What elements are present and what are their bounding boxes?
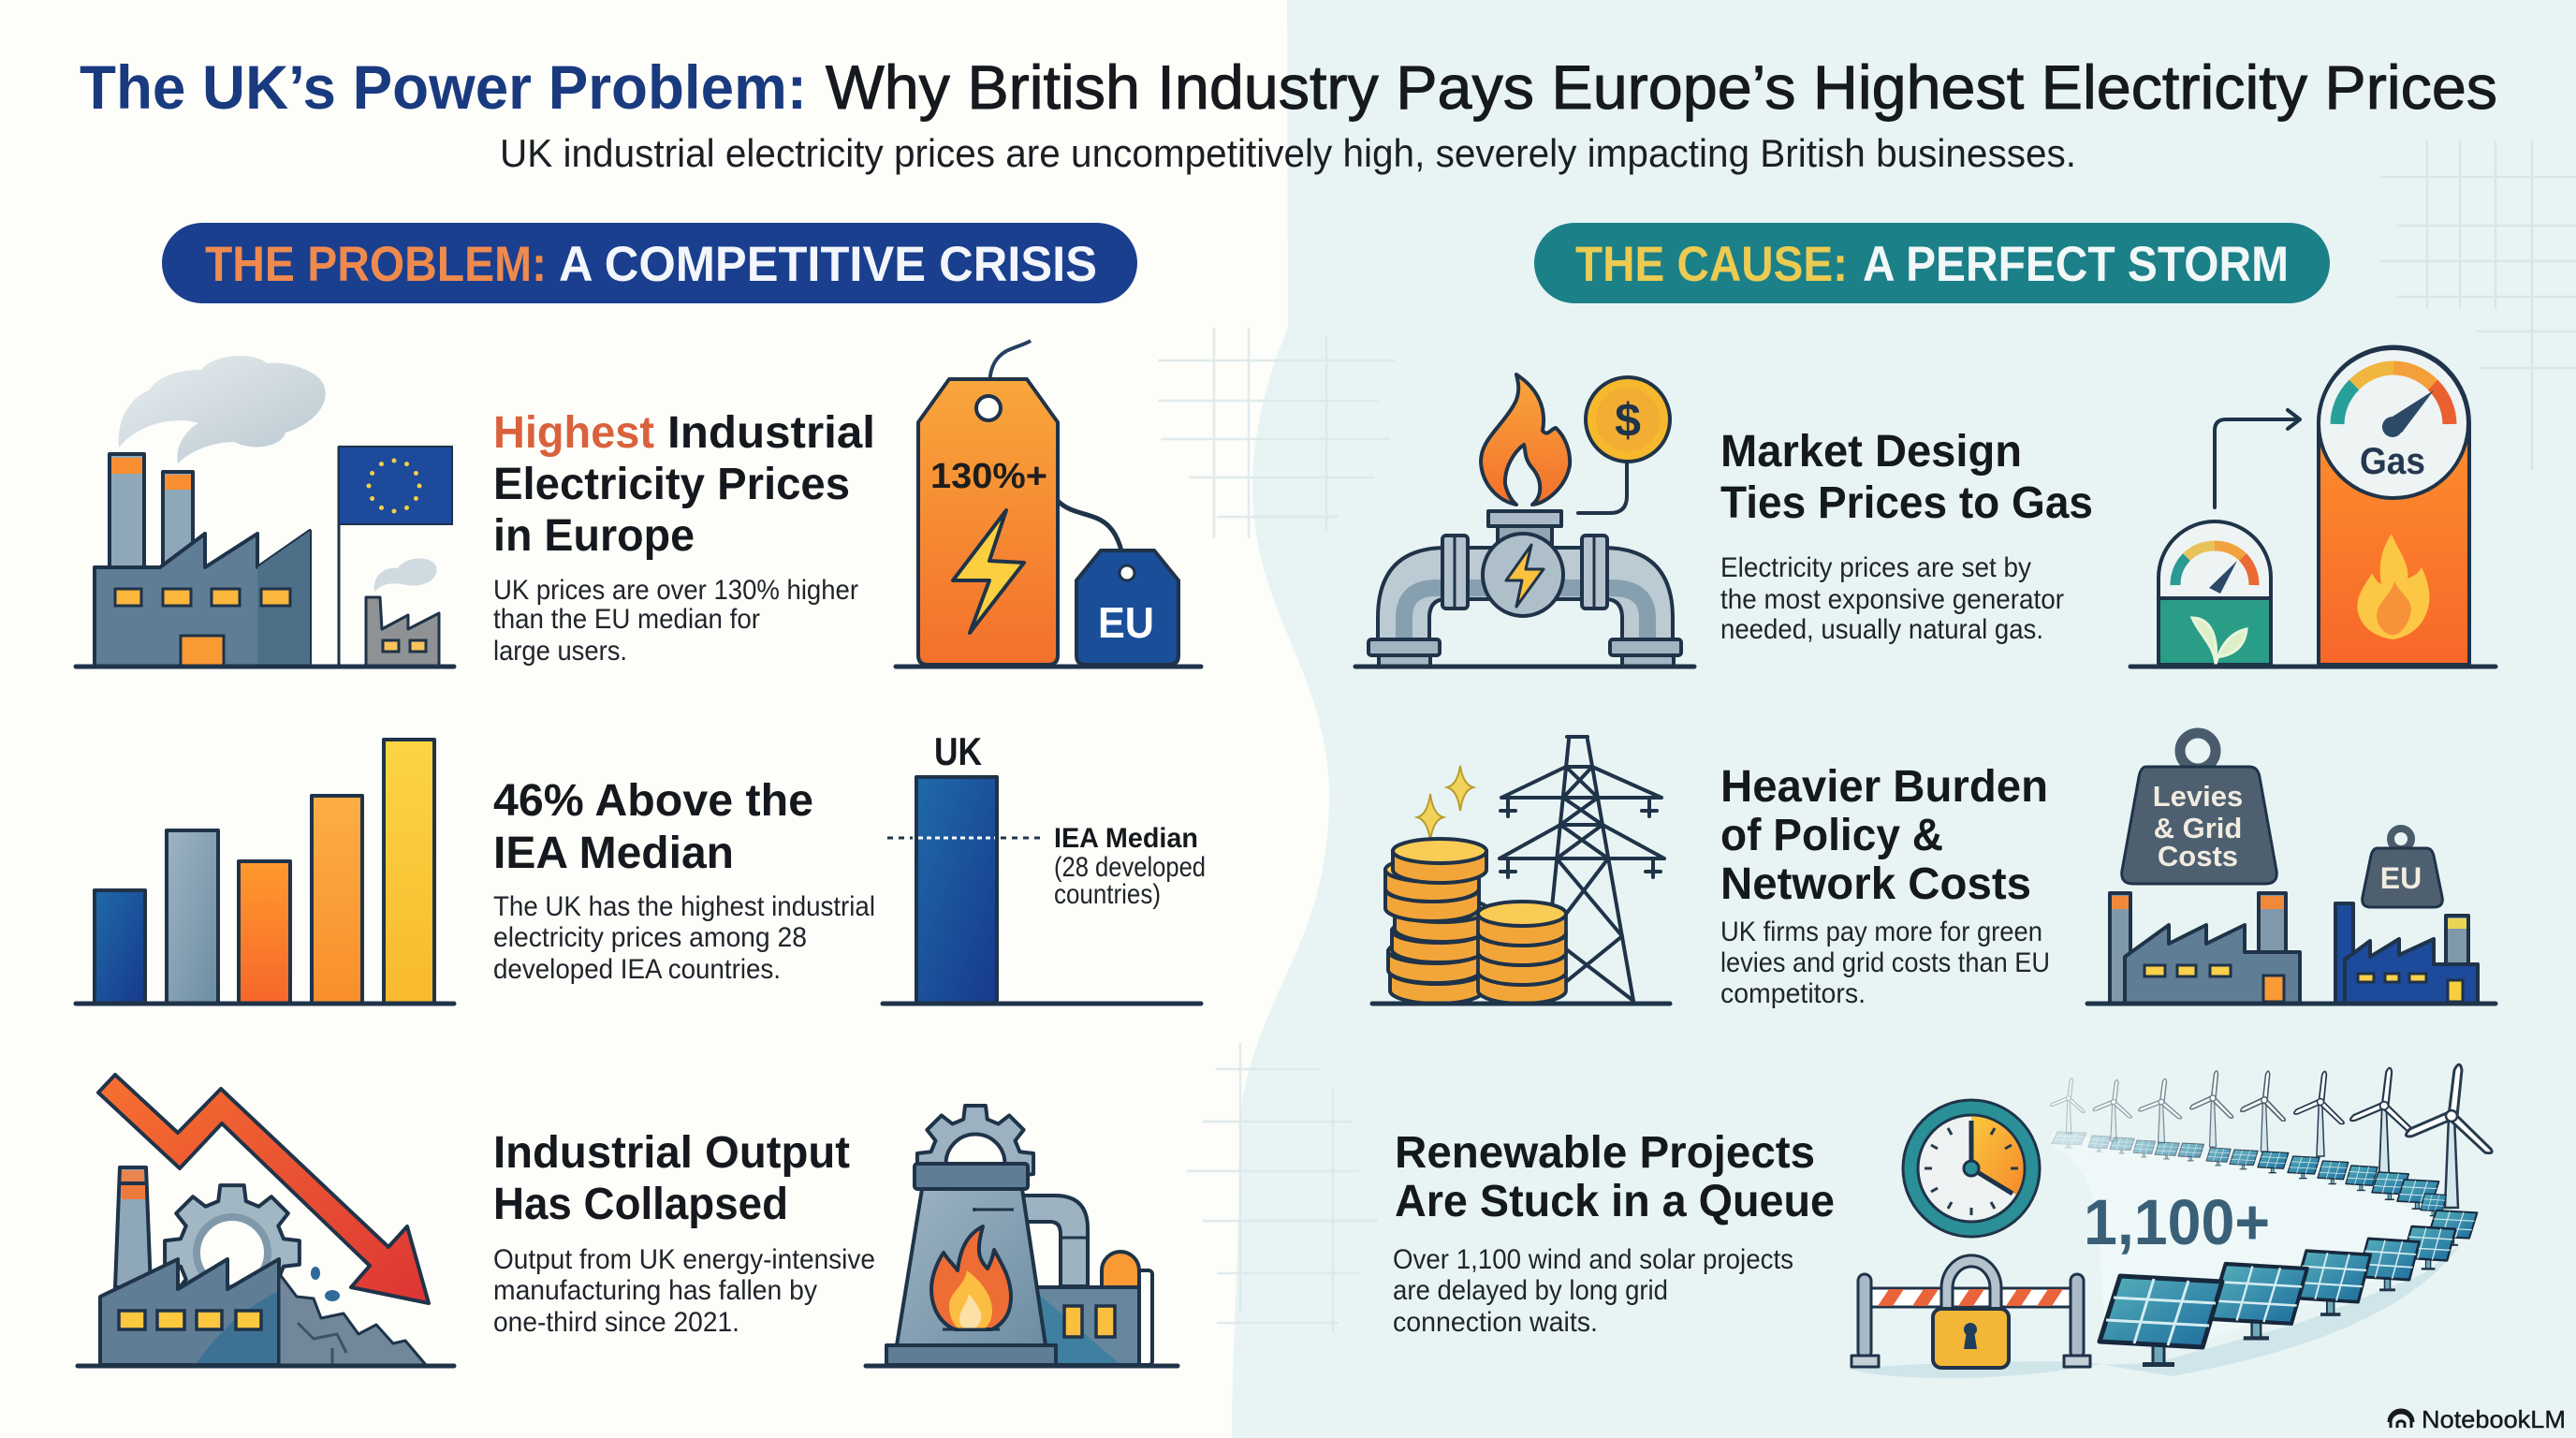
- arrow: price link to gas: [2215, 410, 2300, 507]
- chart: UK bar versus IEA median: [883, 729, 1206, 1004]
- icon: gas pipe, flame and coin: $: [1615, 394, 1641, 447]
- text: output collapsed: Has Collapsed: [493, 1180, 788, 1229]
- tall gas gauge: Gas: [2360, 441, 2425, 482]
- text: policy burden: Network Costs: [1720, 859, 2031, 909]
- text: renewable queue: are delayed by long grid: [1393, 1275, 1668, 1306]
- text: market design: Ties Prices to Gas: [1720, 478, 2093, 528]
- small EU weight: EU: [2380, 861, 2422, 895]
- heading pill: the problem: THE PROBLEM:: [205, 237, 547, 292]
- EU factory: [2335, 903, 2478, 1004]
- heading pill: the cause: THE CAUSE:: [1575, 237, 1848, 292]
- text: output collapsed: [493, 1128, 875, 1338]
- text: policy burden: competitors.: [1720, 978, 1866, 1009]
- text: market design: [1720, 427, 2093, 645]
- heading pill: the problem: [162, 223, 1137, 303]
- solar panels: [2052, 1132, 2477, 1367]
- text: highest prices: UK prices are over 130% higher: [493, 575, 858, 606]
- text: highest prices: Highest: [493, 408, 654, 458]
- NotebookLM logo: NotebookLM: [2422, 1405, 2566, 1433]
- panel: the problem: [76, 223, 1206, 1366]
- text: policy burden: UK firms pay more for green: [1720, 917, 2042, 947]
- text: policy burden: levies and grid costs than EU: [1720, 947, 2050, 978]
- barrier with padlock: [1852, 1261, 2090, 1368]
- subtitle: UK industrial electricity prices are uncompetitively high, severely impacting British businesses.: [500, 131, 2076, 175]
- icon: price tags: [896, 341, 1201, 667]
- background: right panel with wavy edge: [1232, 0, 2576, 1438]
- tall gas gauge: [2319, 346, 2469, 665]
- title: [80, 52, 2497, 122]
- text: market design: Market Design: [1720, 427, 2022, 477]
- light road behind panels: [2052, 1133, 2441, 1348]
- text: highest prices: Industrial: [667, 408, 875, 458]
- text: 46% above median: electricity prices among 28: [493, 922, 807, 953]
- background grid pattern: [1158, 140, 2576, 1332]
- large levies weight: & Grid: [2154, 812, 2242, 844]
- title: The UK’s Power Problem:: [80, 52, 807, 122]
- icon: gas pipe, flame and coin: [1355, 374, 1694, 667]
- text: renewable queue: connection waits.: [1393, 1307, 1598, 1338]
- icon: gauges with gas setting the price: [2130, 346, 2496, 667]
- text: highest prices: Electricity Prices: [493, 460, 850, 509]
- chart: UK bar versus IEA median: UK: [934, 729, 982, 773]
- icon: price tags: 130%+: [930, 457, 1047, 496]
- large levies weight: [2122, 733, 2276, 884]
- text: output collapsed: one-third since 2021.: [493, 1307, 739, 1338]
- clock: [1903, 1100, 2040, 1237]
- icon: renewable queue scene: [1849, 1064, 2492, 1378]
- small EU weight: [2363, 829, 2442, 907]
- icon: falling arrow and damaged factory: [78, 1075, 454, 1366]
- icon: weights on factories: [2087, 733, 2496, 1004]
- text: output collapsed: Output from UK energy-intensive: [493, 1244, 875, 1275]
- chart: UK bar versus IEA median: countries): [1054, 879, 1161, 910]
- text: highest prices: [493, 408, 875, 667]
- text: output collapsed: manufacturing has fallen by: [493, 1275, 817, 1306]
- heading pill: the cause: A PERFECT STORM: [1863, 237, 2289, 292]
- text: renewable queue: Are Stuck in a Queue: [1395, 1177, 1835, 1226]
- chart: UK bar versus IEA median: (28 developed: [1054, 852, 1206, 883]
- text: renewable queue: Over 1,100 wind and solar projects: [1393, 1244, 1793, 1275]
- text: 46% above median: IEA Median: [493, 829, 734, 878]
- large levies weight: Levies: [2153, 780, 2243, 813]
- icon: factory with smoke and EU flag: [76, 356, 454, 667]
- chart: UK bar versus IEA median: IEA Median: [1054, 823, 1198, 854]
- title: Why British Industry Pays Europe’s Highest Electricity Prices: [826, 52, 2497, 122]
- text: policy burden: Heavier Burden: [1720, 762, 2048, 812]
- icon: coins and pylon: [1372, 737, 1670, 1004]
- icon: industrial furnace with gear: [866, 1106, 1178, 1366]
- bar chart: rising prices: [76, 740, 454, 1004]
- text: 46% above median: The UK has the highest industrial: [493, 891, 875, 922]
- text: highest prices: than the EU median for: [493, 604, 760, 635]
- text: output collapsed: Industrial Output: [493, 1128, 850, 1178]
- text: renewable queue: Renewable Projects: [1395, 1128, 1815, 1178]
- text: highest prices: in Europe: [493, 511, 695, 561]
- heading pill: the cause: [1534, 223, 2330, 303]
- text: 46% above median: 46% Above the: [493, 776, 813, 826]
- UK factory: [2110, 893, 2300, 1004]
- ground shadow: [1849, 1245, 2460, 1378]
- text: 46% above median: developed IEA countries.: [493, 954, 781, 985]
- text: market design: needed, usually natural gas.: [1720, 614, 2043, 645]
- heading pill: the problem: A COMPETITIVE CRISIS: [559, 237, 1097, 292]
- wind turbines: [2051, 1064, 2492, 1208]
- text: policy burden: of Policy &: [1720, 811, 1943, 860]
- icon: price tags: EU: [1098, 598, 1154, 647]
- text: market design: Electricity prices are set by: [1720, 552, 2031, 583]
- panel: the cause: [1355, 223, 2496, 1378]
- text: highest prices: large users.: [493, 636, 627, 667]
- number: 1,100+: 1,100+: [2084, 1186, 2270, 1258]
- large levies weight: Costs: [2158, 840, 2238, 873]
- text: 46% above median: [493, 776, 875, 985]
- text: market design: the most exponsive generator: [1720, 584, 2064, 615]
- small green gauge: [2159, 521, 2271, 665]
- text: renewable queue: [1393, 1128, 1835, 1338]
- text: policy burden: [1720, 762, 2050, 1009]
